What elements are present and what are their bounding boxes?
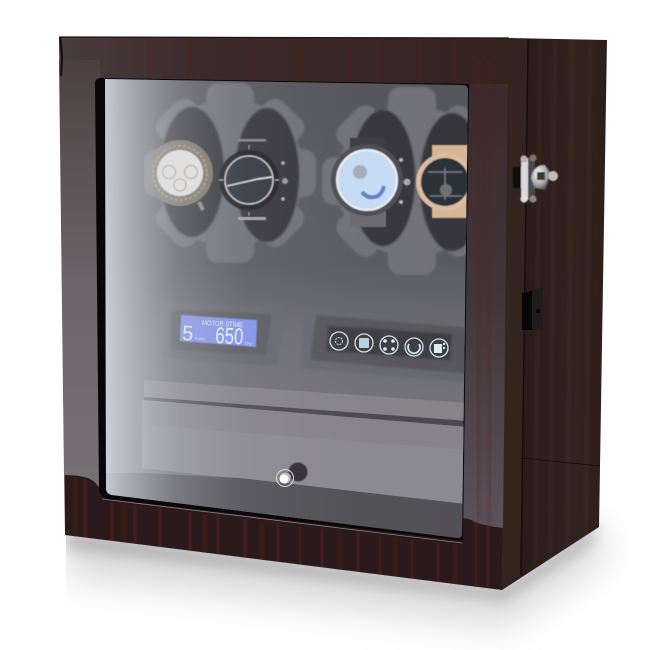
watch cradle ovals: [160, 107, 484, 251]
LCD turns reading: 5: [182, 322, 194, 346]
bottom frame wood grain: [72, 476, 490, 588]
drawer: [142, 380, 468, 505]
floor shadow: [66, 524, 604, 625]
LCD turns label: TURN: [194, 336, 205, 342]
LCD speed label: TPD: [244, 341, 252, 346]
touch control strip: [326, 326, 452, 360]
watch 2: black diver: [219, 139, 288, 220]
LCD speed reading: 650: [215, 322, 244, 349]
drawer knob: [276, 462, 308, 486]
button: stop: [355, 334, 373, 352]
LCD panel housing: [162, 303, 283, 366]
door bottom highlight line: [102, 499, 462, 543]
touch buttons: [330, 332, 448, 357]
LCD status row: MOTOR STIME: [202, 320, 243, 329]
watch 1: white chronograph: [147, 140, 213, 210]
button: rotate: [405, 338, 423, 356]
door latch: [513, 154, 558, 203]
right frame wood streaks: [478, 60, 490, 525]
gear plate left: [144, 83, 316, 263]
watch 4: rose gold skeleton: [416, 145, 474, 218]
lower glass band: [106, 473, 466, 540]
side panel: [502, 38, 607, 590]
glass reflection: [105, 79, 298, 516]
glass door recess: [95, 78, 469, 541]
watch winder cabinet: [59, 37, 607, 610]
LCD display: [180, 315, 257, 349]
watch 3: blue dial: [331, 138, 410, 227]
glass window: [105, 79, 468, 538]
button: light: [330, 332, 348, 350]
button: menu: [430, 339, 448, 357]
button: mode: [380, 336, 398, 354]
side hinge lock: [522, 287, 543, 330]
top frame wood streaks: [150, 38, 455, 84]
front frame: [59, 37, 509, 610]
gear plate right: [322, 86, 468, 276]
touch panel housing: [311, 322, 465, 382]
